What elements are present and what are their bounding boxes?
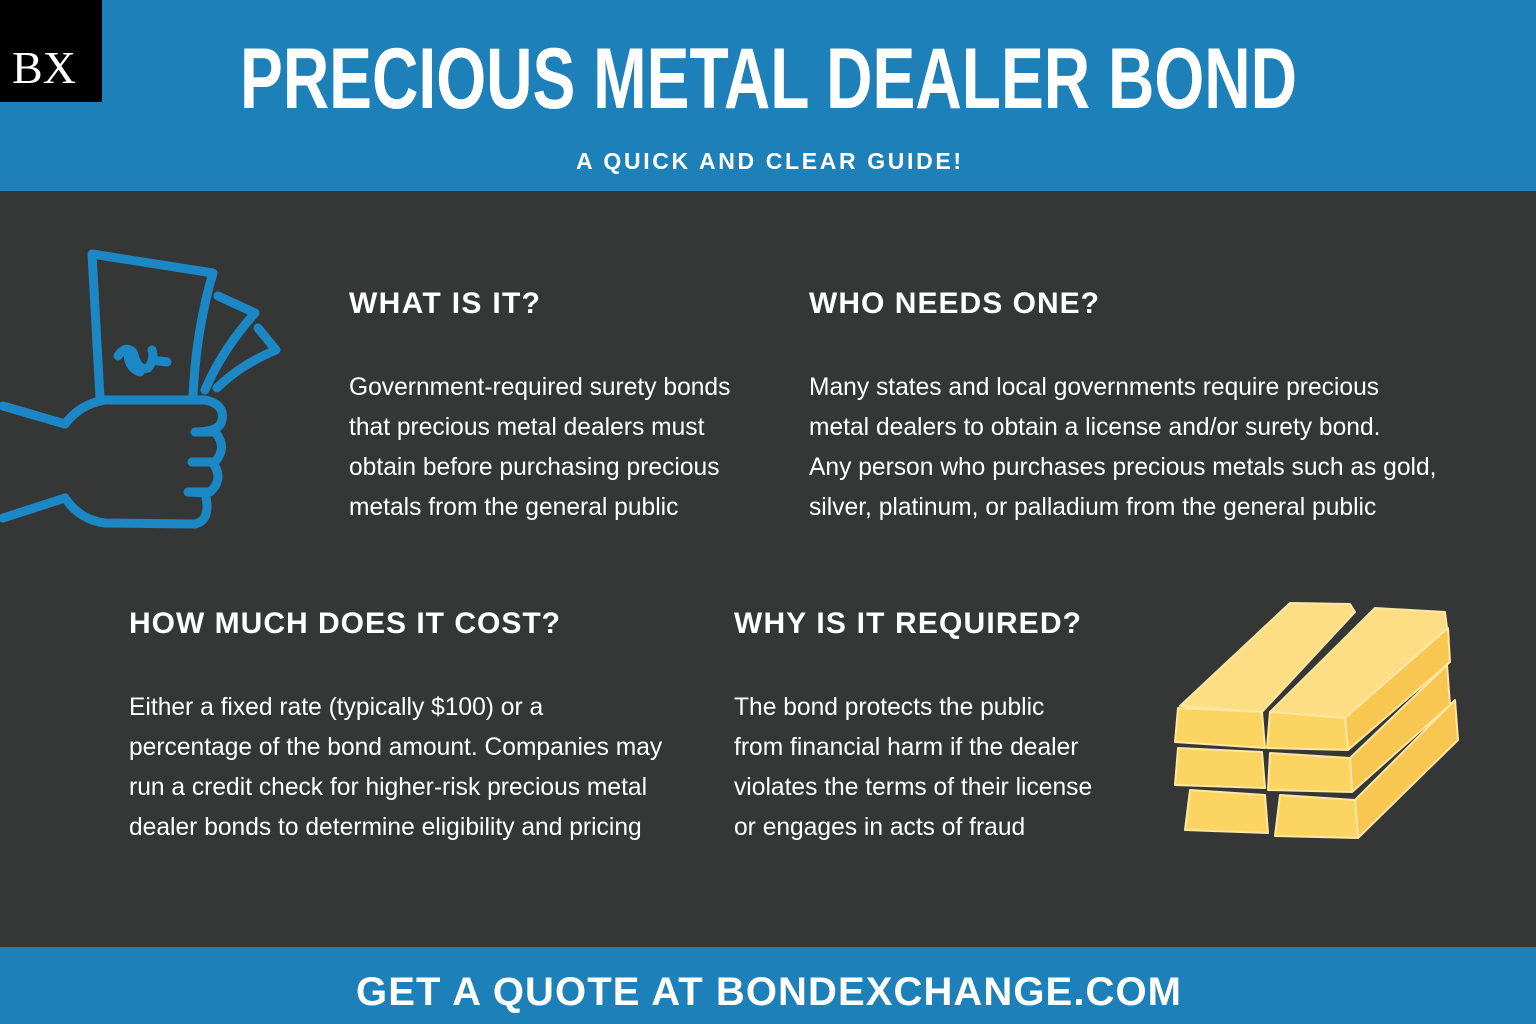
section: why is it required: from financial harm if the dealer bbox=[734, 734, 1078, 761]
icon: gold bars bbox=[1175, 603, 1458, 838]
section: how much does it cost: run a credit check for higher-risk precious metal bbox=[129, 774, 647, 801]
section: how much does it cost bbox=[129, 607, 663, 841]
footer text: GET A QUOTE AT BONDEXCHANGE.COM bbox=[356, 970, 1181, 1014]
footer band bbox=[0, 947, 1536, 1024]
section: what is it: that precious metal dealers must bbox=[349, 414, 705, 441]
section: who needs one: Many states and local governments require precious bbox=[809, 374, 1379, 401]
section: who needs one: WHO NEEDS ONE? bbox=[809, 287, 1099, 320]
section: who needs one bbox=[809, 287, 1436, 521]
section: what is it: Government-required surety bonds bbox=[349, 374, 730, 401]
logo: BX bbox=[0, 0, 102, 102]
section: who needs one: Any person who purchases precious metals such as gold, bbox=[809, 454, 1436, 481]
logo: BX: BX bbox=[12, 42, 76, 93]
section: why is it required: violates the terms of their license bbox=[734, 774, 1092, 801]
section: why is it required: WHY IS IT REQUIRED? bbox=[734, 607, 1081, 640]
subtitle: A QUICK AND CLEAR GUIDE! bbox=[576, 148, 961, 174]
section: why is it required bbox=[734, 607, 1092, 841]
section: how much does it cost: dealer bonds to determine eligibility and pricing bbox=[129, 814, 642, 841]
section: who needs one: metal dealers to obtain a license and/or surety bond. bbox=[809, 414, 1380, 441]
section: what is it: WHAT IS IT? bbox=[349, 287, 540, 320]
icon: hand holding cash bbox=[3, 254, 276, 524]
section: what is it bbox=[349, 287, 730, 521]
section: what is it: obtain before purchasing precious bbox=[349, 454, 720, 481]
section: how much does it cost: percentage of the bond amount. Companies may bbox=[129, 734, 663, 761]
section: why is it required: The bond protects the public bbox=[734, 694, 1044, 721]
section: who needs one: silver, platinum, or palladium from the general public bbox=[809, 494, 1376, 521]
section: how much does it cost: HOW MUCH DOES IT COST? bbox=[129, 607, 560, 640]
section: how much does it cost: Either a fixed rate (typically $100) or a bbox=[129, 694, 544, 721]
section: why is it required: or engages in acts of fraud bbox=[734, 814, 1025, 841]
header band bbox=[0, 0, 1536, 191]
section: what is it: metals from the general public bbox=[349, 494, 678, 521]
